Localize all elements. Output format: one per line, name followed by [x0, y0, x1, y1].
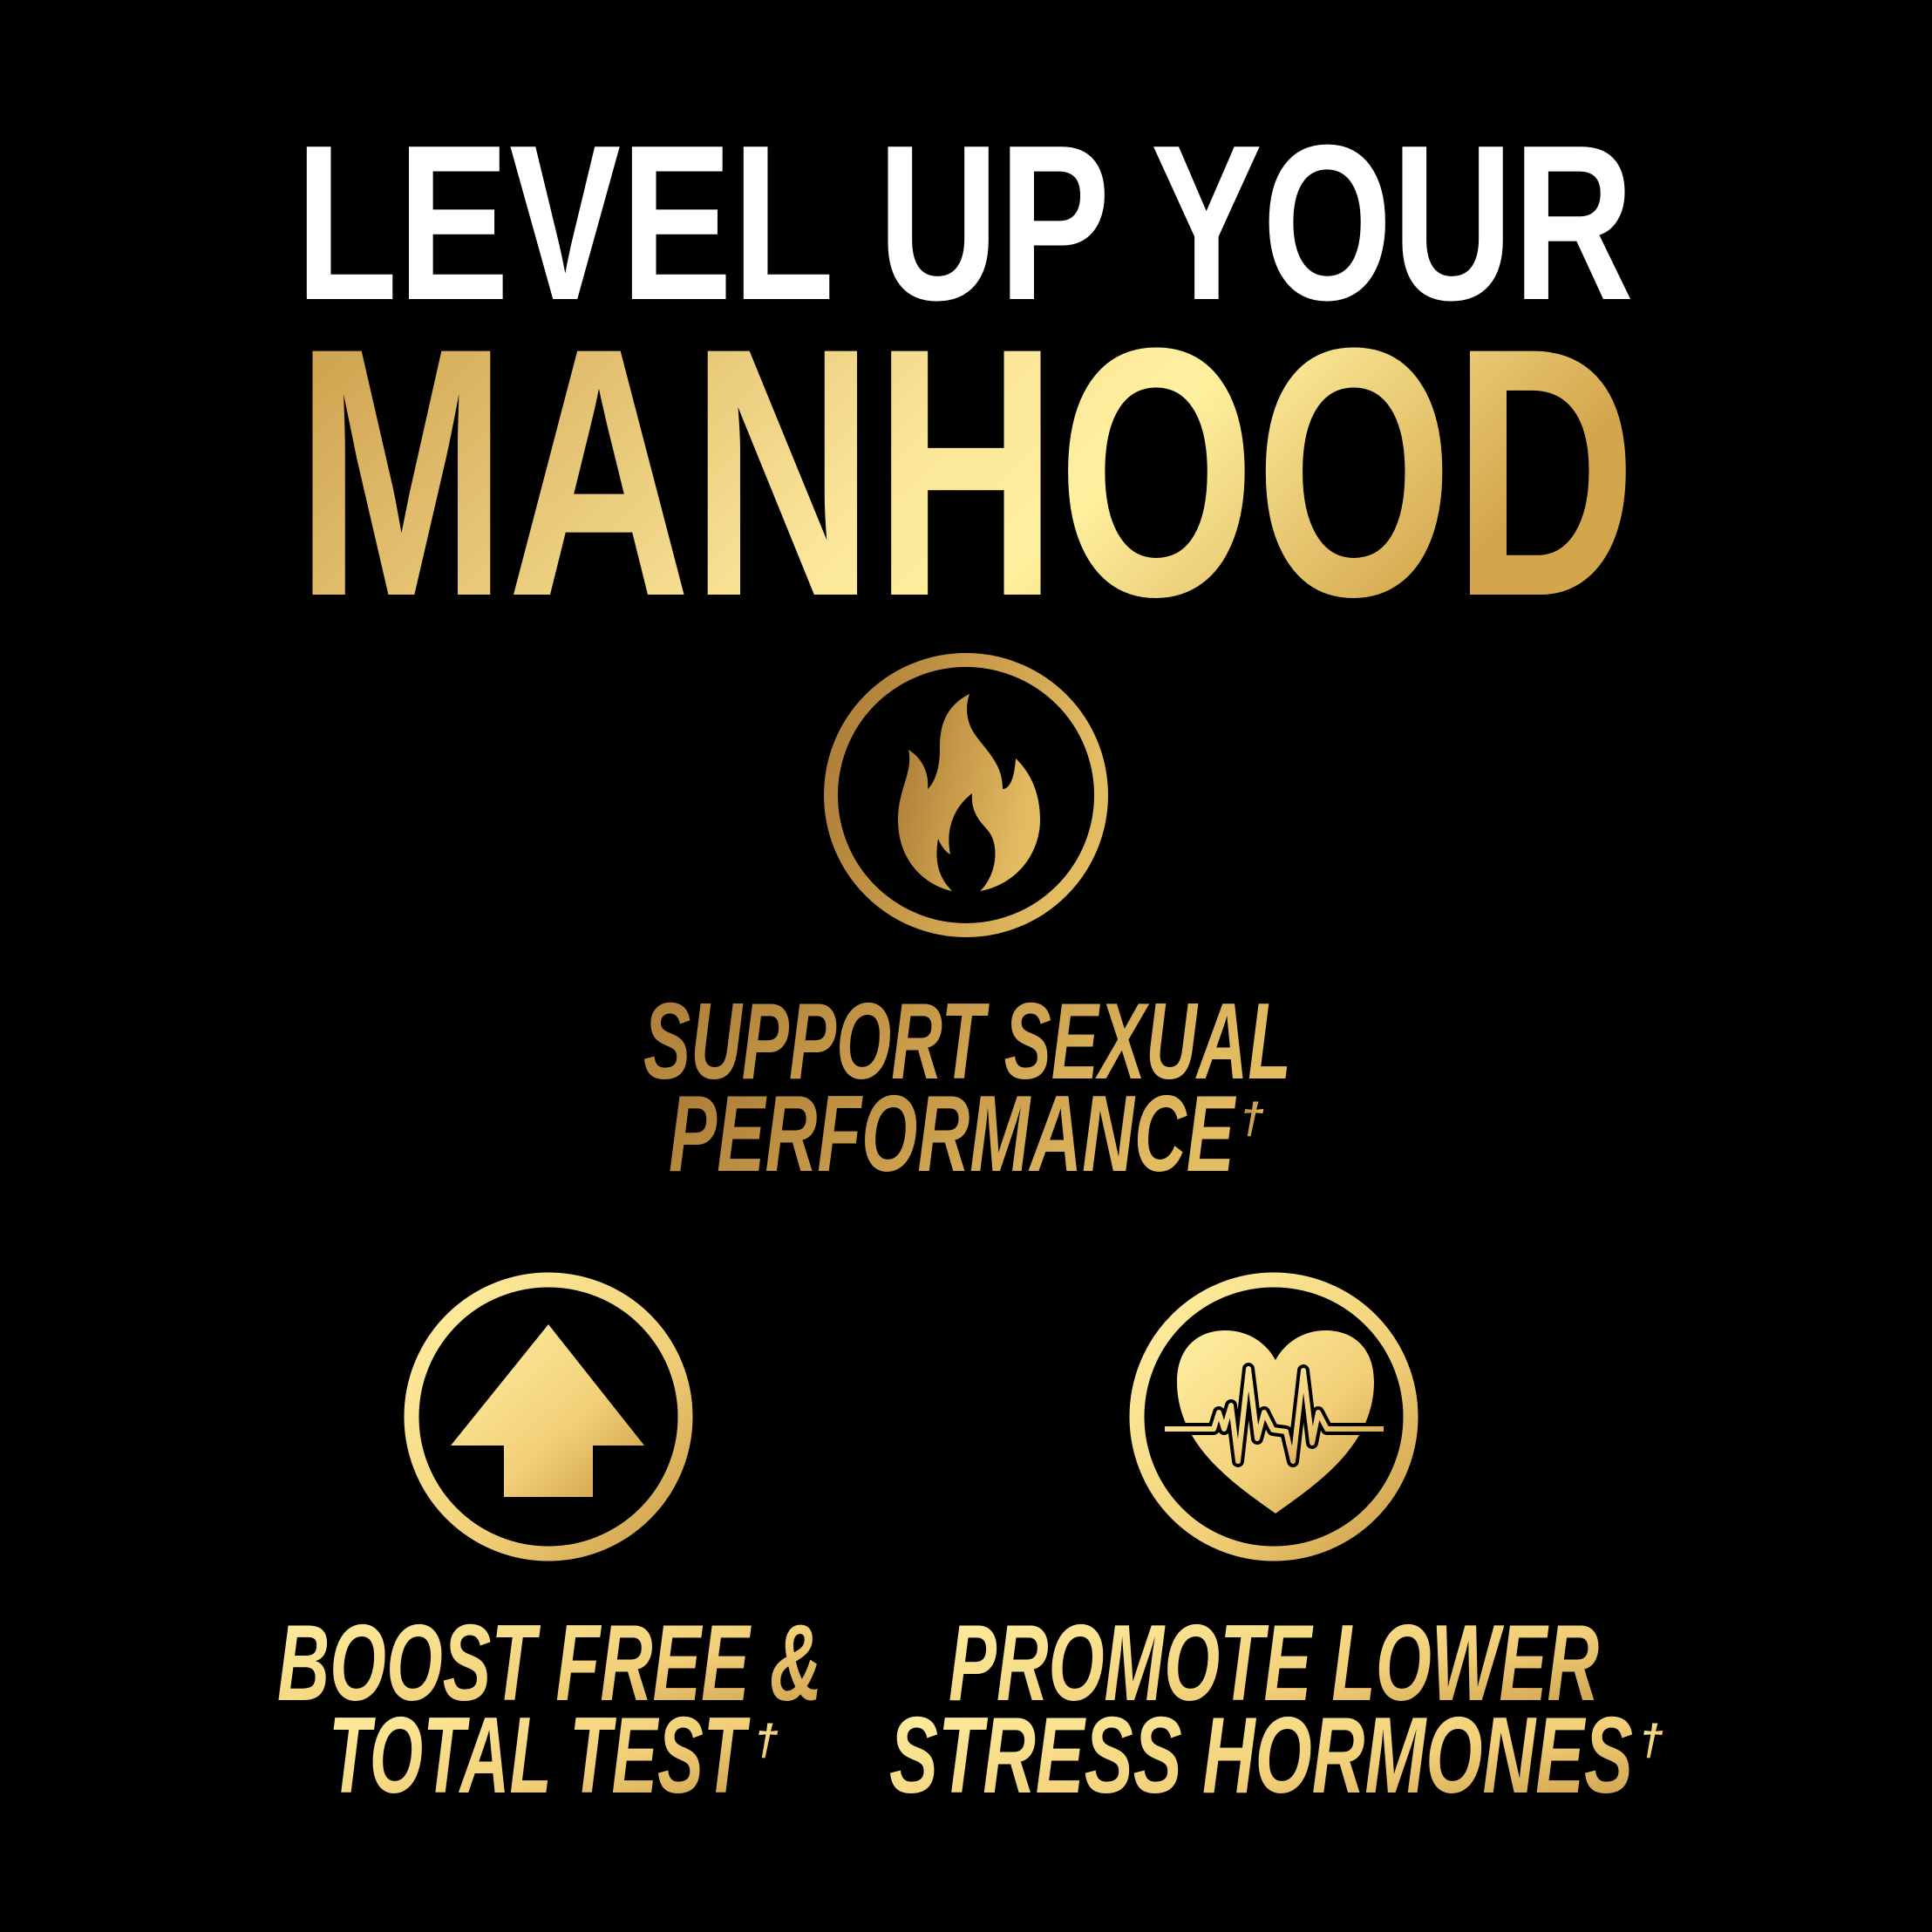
text: boost free & total test: BOOST FREE & [277, 1603, 822, 1724]
icon: arrow up [412, 1280, 685, 1554]
text: promote lower stress hormones [889, 1603, 1663, 1816]
text: boost free & total test: † [754, 1716, 779, 1765]
icon: heart with pulse [1137, 1280, 1411, 1554]
text: support sexual performance: SUPPORT SEXUAL [643, 982, 1291, 1102]
text: promote lower stress hormones: PROMOTE LOWER [949, 1603, 1599, 1724]
text: boost free & total test: TOTAL TEST [329, 1696, 751, 1816]
text: support sexual performance [643, 982, 1291, 1194]
icon: flame [831, 660, 1101, 930]
text: boost free & total test [277, 1603, 822, 1816]
text: support sexual performance: PERFORMANCE [669, 1074, 1236, 1194]
text: promote lower stress hormones: † [1639, 1716, 1663, 1765]
text: support sexual performance: † [1240, 1094, 1264, 1143]
